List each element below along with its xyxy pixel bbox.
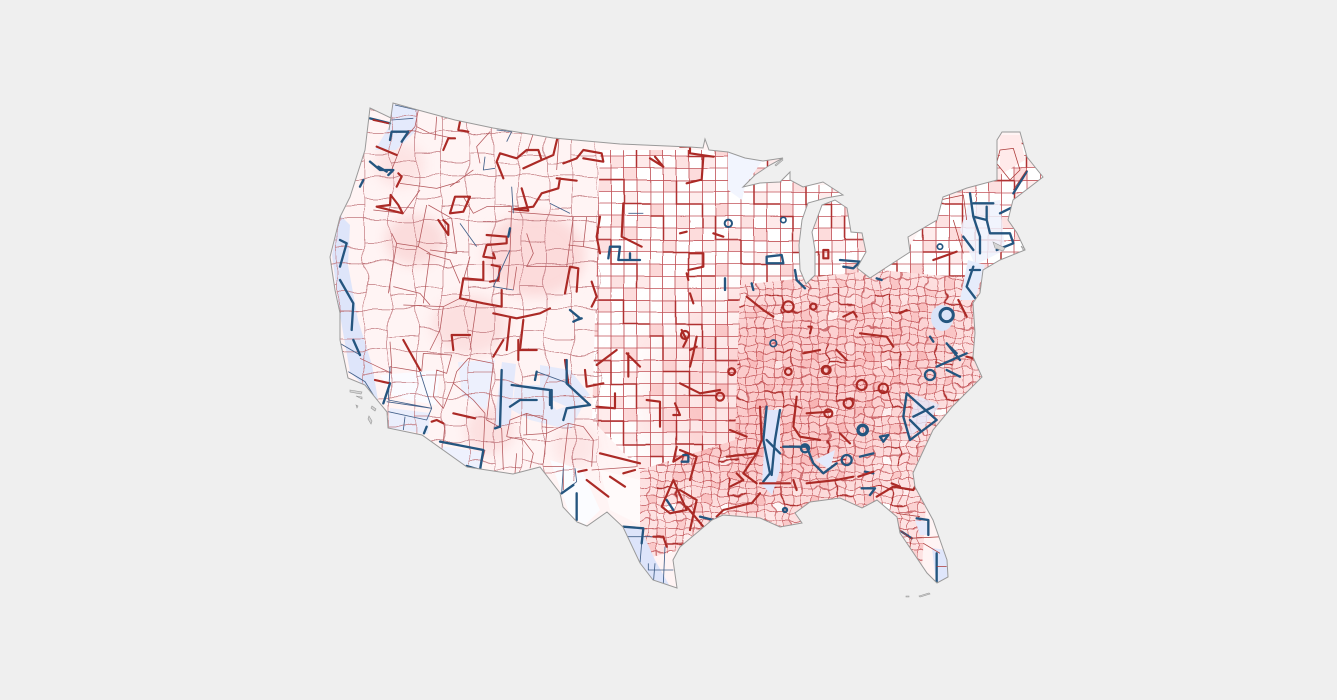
county boundaries northwest, drawn bbox=[373, 110, 600, 350]
county swings: south and southeast bbox=[680, 347, 973, 582]
blue-leaning and white regions bbox=[332, 104, 1025, 590]
county grid: upper midwest and northeast bbox=[800, 142, 1042, 278]
county boundaries southwest, drawn bbox=[340, 342, 673, 583]
soft colour patches bbox=[375, 143, 597, 467]
county grid: south and appalachia bbox=[640, 270, 982, 564]
map: US county results bbox=[330, 102, 1044, 598]
thick red county swings: west bbox=[377, 122, 687, 350]
county swings: midwest and northeast bbox=[680, 147, 1027, 375]
county grid: great plains bbox=[592, 150, 798, 470]
county boundaries: west bbox=[325, 100, 598, 480]
pink wash over the central states bbox=[650, 290, 955, 495]
thick red county swings: southwest and texas bbox=[353, 340, 687, 547]
blue county swings: pacific and northern plains bbox=[340, 105, 643, 330]
US outline bbox=[330, 103, 1043, 588]
land fill bbox=[330, 104, 1042, 587]
islands: channel islands, keys, maine bbox=[350, 159, 1025, 597]
